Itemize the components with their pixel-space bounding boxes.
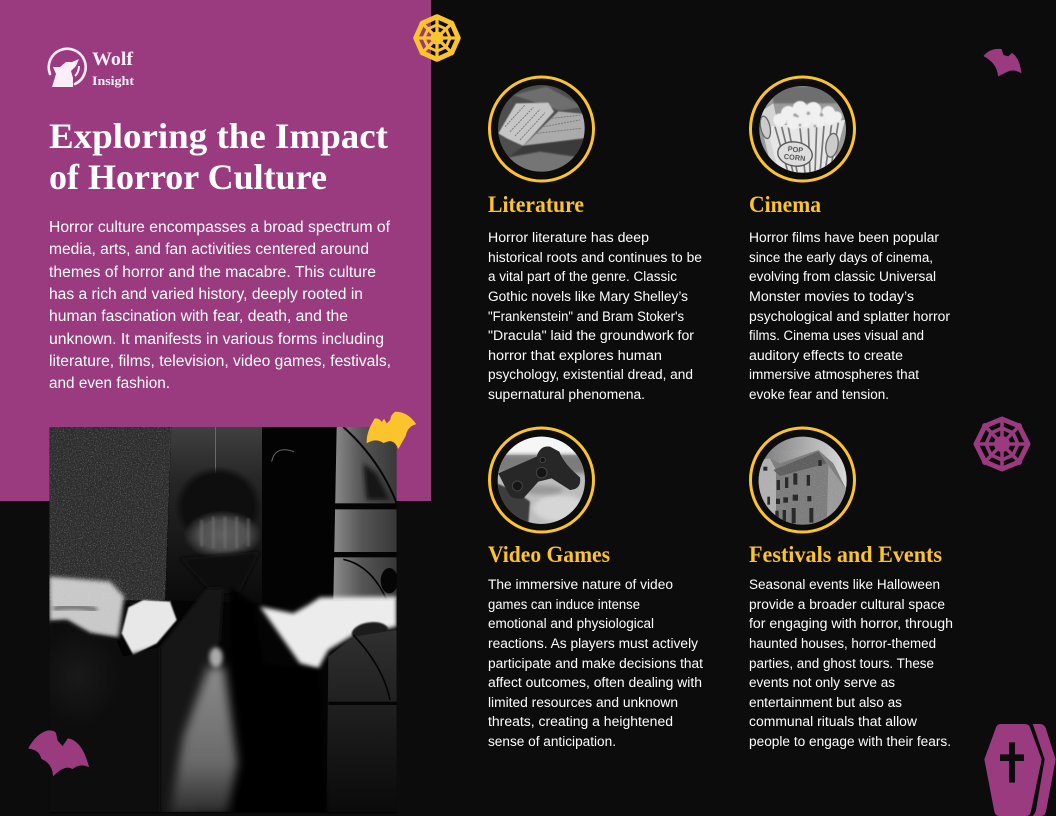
text: Video Games: limited resources and unknown bbox=[488, 695, 678, 710]
text: Literature: "Dracula" laid the groundwork for bbox=[488, 328, 695, 343]
text: Festivals and Events: for engaging with horror, through bbox=[749, 616, 953, 631]
text: Cinema: immersive atmospheres that bbox=[749, 367, 919, 382]
icon: purple bat top right bbox=[984, 49, 1021, 76]
ring bbox=[490, 77, 594, 181]
text: Video Games: affect outcomes, often dealing with bbox=[488, 675, 702, 690]
intro paragraph: human fascination with fear, death, and the bbox=[49, 308, 348, 325]
text: Video Games: participate and make decisions that bbox=[488, 656, 703, 671]
text: Festivals and Events: people to engage with their fears. bbox=[749, 734, 951, 749]
text: Literature: "Frankenstein" and Bram Stoker's bbox=[488, 309, 684, 324]
image: game controller bbox=[490, 428, 594, 532]
text: Literature: horror that explores human bbox=[488, 348, 662, 363]
icon: yellow spider web bbox=[414, 15, 460, 61]
logo wordmark: Insight: Insight bbox=[92, 73, 135, 88]
text: Cinema: evolving from classic Universal bbox=[749, 269, 936, 284]
logo: Wolf Insight bbox=[49, 49, 135, 88]
icon: yellow bat bbox=[367, 412, 416, 448]
heading: Literature: Literature bbox=[488, 192, 584, 217]
title: Exploring the Impact bbox=[49, 116, 388, 156]
intro paragraph: has a rich and varied history, deeply rooted in bbox=[49, 286, 363, 303]
text: Video Games: reactions. As players must actively bbox=[488, 636, 698, 651]
image: popcorn box bbox=[750, 77, 854, 181]
coffin cross bbox=[1000, 742, 1024, 783]
text: Literature: a vital part of the genre. Classic bbox=[488, 269, 677, 284]
text: Video Games: emotional and physiological bbox=[488, 616, 654, 631]
text: Festivals and Events: events not only serve as bbox=[749, 675, 895, 690]
icon: howling wolf bbox=[49, 49, 86, 87]
text: Literature: Horror literature has deep bbox=[488, 230, 649, 245]
heading: Video Games: Video Games bbox=[488, 542, 610, 567]
intro paragraph: literature, films, television, video games, festivals, bbox=[49, 353, 391, 370]
text: Cinema: Horror films have been popular bbox=[749, 230, 940, 245]
text: Literature: psychology, existential dread, and bbox=[488, 367, 693, 382]
text: Cinema: psychological and splatter horror bbox=[749, 309, 951, 324]
text: Cinema: evoke fear and tension. bbox=[749, 387, 889, 402]
panel: purple intro bbox=[0, 0, 431, 501]
book photo bbox=[497, 83, 587, 173]
building photo bbox=[758, 436, 847, 525]
text: Cinema: since the early days of cinema, bbox=[749, 250, 933, 265]
text: Literature bbox=[488, 230, 702, 402]
photo: person covering face in shadows bbox=[35, 427, 398, 813]
image: open book bbox=[490, 77, 594, 181]
text: Video Games bbox=[488, 577, 703, 749]
icon: purple coffin bbox=[984, 724, 1056, 816]
heading: Festivals and Events: Festivals and Events bbox=[749, 542, 942, 567]
icon: purple spider web bbox=[974, 417, 1030, 471]
image: gothic building bbox=[750, 428, 854, 532]
text: Cinema bbox=[749, 230, 951, 402]
text: Cinema: auditory effects to create bbox=[749, 348, 903, 363]
intro paragraph: and even fashion. bbox=[49, 375, 170, 392]
text: Festivals and Events bbox=[749, 577, 953, 749]
intro paragraph: media, arts, and fan activities centered around bbox=[49, 241, 369, 258]
text: Festivals and Events: provide a broader cultural space bbox=[749, 597, 945, 612]
popcorn box lettering: POP bbox=[787, 144, 804, 155]
logo wordmark: Wolf: Wolf bbox=[92, 49, 134, 70]
icon: purple bat bottom left bbox=[29, 731, 89, 776]
ring bbox=[490, 428, 594, 532]
text: Cinema: films. Cinema uses visual and bbox=[749, 328, 924, 343]
text: Video Games: The immersive nature of video bbox=[488, 577, 673, 592]
text: Video Games: threats, creating a heightened bbox=[488, 714, 673, 729]
controller photo bbox=[497, 435, 587, 525]
text: Video Games: games can induce intense bbox=[488, 597, 640, 612]
title: of Horror Culture bbox=[49, 157, 327, 197]
ring bbox=[750, 77, 854, 181]
text: Literature: Gothic novels like Mary Shelley’s bbox=[488, 289, 688, 304]
heading: Cinema: Cinema bbox=[749, 192, 821, 217]
intro paragraph: unknown. It manifests in various forms including bbox=[49, 331, 384, 348]
text: Cinema: Monster movies to today’s bbox=[749, 289, 914, 304]
text: Festivals and Events: haunted houses, horror-themed bbox=[749, 636, 936, 651]
intro paragraph: Horror culture encompasses a broad spectrum of bbox=[49, 219, 391, 236]
text: Literature: historical roots and continues to be bbox=[488, 250, 702, 265]
popcorn box lettering bbox=[784, 146, 806, 161]
text: Literature: supernatural phenomena. bbox=[488, 387, 645, 402]
text: Festivals and Events: entertainment but also as bbox=[749, 695, 902, 710]
intro paragraph bbox=[49, 219, 391, 392]
intro paragraph: themes of horror and the macabre. This culture bbox=[49, 264, 376, 281]
text: Festivals and Events: communal rituals that allow bbox=[749, 714, 917, 729]
text: Festivals and Events: Seasonal events like Halloween bbox=[749, 577, 940, 592]
popcorn photo bbox=[759, 86, 846, 173]
title bbox=[49, 116, 388, 197]
popcorn box lettering: CORN bbox=[783, 152, 806, 163]
text: Festivals and Events: parties, and ghost tours. These bbox=[749, 656, 934, 671]
text: Video Games: sense of anticipation. bbox=[488, 734, 616, 749]
ring bbox=[750, 428, 854, 532]
